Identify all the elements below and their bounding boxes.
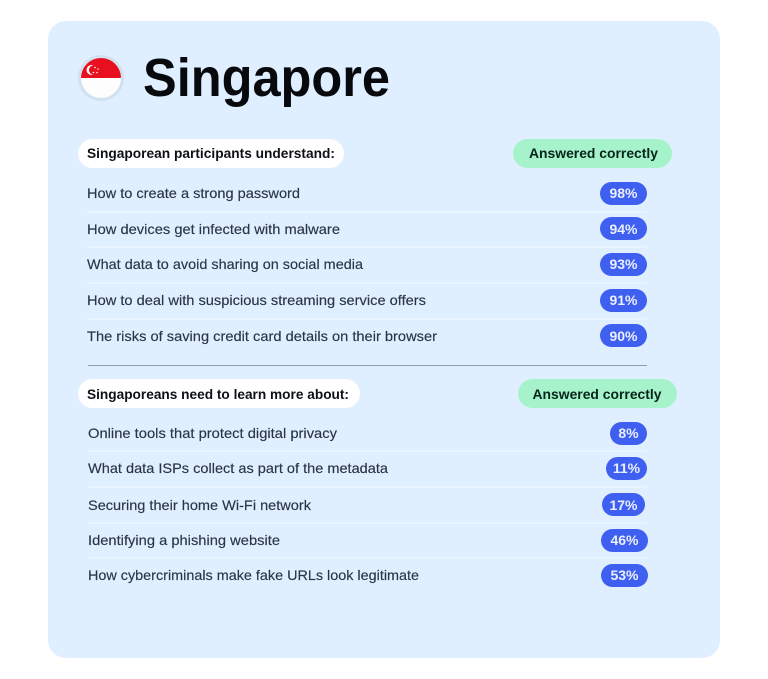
title: Singapore bbox=[143, 48, 390, 108]
row: social media 93%: 93% bbox=[609, 256, 638, 272]
row: home Wi-Fi 17% bbox=[88, 493, 645, 516]
row: privacy tools 8%: 8% bbox=[618, 425, 639, 441]
row: privacy tools 8%: Online tools that protect digital privacy bbox=[88, 425, 337, 441]
row: ISP metadata 11%: 11% bbox=[613, 460, 641, 476]
row: credit card details 90%: The risks of saving credit card details on their browser bbox=[87, 328, 437, 344]
row: fake URLs 53%: How cybercriminals make fake URLs look legitimate bbox=[88, 567, 419, 583]
badge: answered correctly bbox=[513, 139, 672, 168]
row: streaming offers 91%: 91% bbox=[609, 292, 638, 308]
row: ISP metadata 11% bbox=[88, 457, 647, 480]
row: strong password 98%: How to create a strong password bbox=[87, 185, 300, 201]
badge: answered correctly bbox=[518, 379, 677, 408]
section: what to learn more about bbox=[78, 379, 677, 587]
row: home Wi-Fi 17%: Securing their home Wi-Fi network bbox=[88, 497, 312, 513]
row: streaming offers 91%: How to deal with suspicious streaming service offers bbox=[87, 292, 426, 308]
row: ISP metadata 11%: What data ISPs collect as part of the metadata bbox=[88, 460, 388, 476]
row: strong password 98%: 98% bbox=[609, 185, 638, 201]
row: social media 93% bbox=[87, 253, 647, 276]
section: what participants understand bbox=[78, 139, 672, 347]
heading: participants understand bbox=[78, 139, 344, 168]
row: social media 93%: What data to avoid sharing on social media bbox=[87, 256, 363, 272]
row: phishing website 46% bbox=[88, 529, 648, 552]
icon: Singapore flag bbox=[78, 55, 124, 101]
heading: need to learn more: Singaporeans need to learn more about: bbox=[87, 386, 349, 402]
row: fake URLs 53% bbox=[88, 564, 648, 587]
badge: answered correctly: Answered correctly bbox=[532, 386, 662, 402]
row: home Wi-Fi 17%: 17% bbox=[609, 497, 638, 513]
row: malware 94% bbox=[87, 217, 647, 240]
row: phishing website 46%: 46% bbox=[610, 532, 639, 548]
row: privacy tools 8% bbox=[88, 422, 647, 445]
row: streaming offers 91% bbox=[87, 289, 647, 312]
row: credit card details 90% bbox=[87, 324, 647, 347]
badge: answered correctly: Answered correctly bbox=[529, 145, 658, 161]
row: phishing website 46%: Identifying a phishing website bbox=[88, 532, 280, 548]
heading: need to learn more bbox=[78, 379, 360, 408]
row: strong password 98% bbox=[87, 182, 647, 205]
row: fake URLs 53%: 53% bbox=[610, 567, 639, 583]
row: malware 94%: How devices get infected with malware bbox=[87, 221, 340, 237]
heading: participants understand: Singaporean participants understand: bbox=[87, 145, 335, 161]
row: malware 94%: 94% bbox=[609, 221, 638, 237]
row: credit card details 90%: 90% bbox=[609, 328, 638, 344]
